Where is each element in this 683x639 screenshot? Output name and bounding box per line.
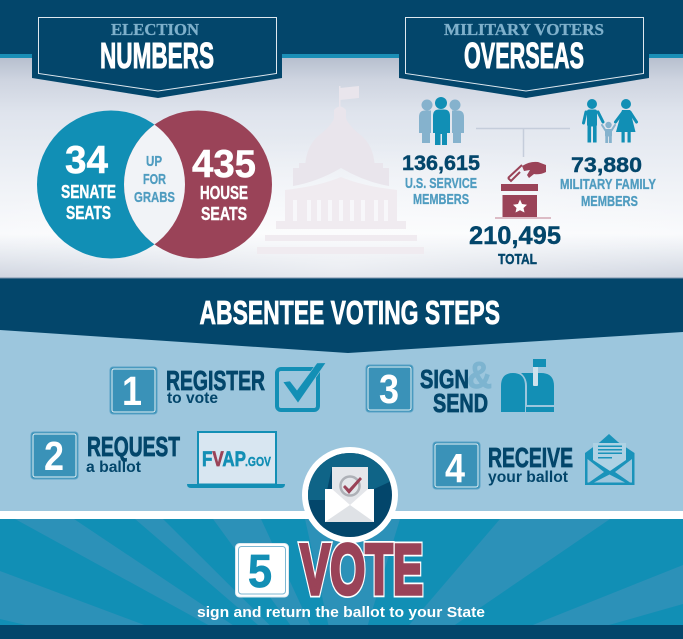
icon: laptop with fvap.gov: FVAP [202, 448, 246, 471]
banner: election numbers [32, 0, 282, 98]
step 4: receive: your ballot [488, 469, 569, 486]
step 5: vote: 5 [248, 545, 272, 597]
step 3: sign and send: SEND [433, 388, 488, 418]
icon: open envelope with letter [585, 434, 634, 485]
panel: vote footer [0, 511, 683, 639]
stat: service members [402, 152, 480, 208]
step 5: vote: VOTE [300, 531, 423, 610]
stat: total: TOTAL [498, 251, 537, 268]
house seats label [192, 143, 256, 224]
stat: total: 210,495 [469, 222, 561, 250]
banner: military voters overseas: OVERSEAS [464, 35, 584, 76]
stat: military family [560, 154, 656, 210]
senate seats label: SEATS [66, 203, 111, 223]
venn diagram: seats up for grabs [37, 110, 272, 258]
up for grabs label: GRABS [134, 189, 175, 206]
step 4: receive [433, 442, 573, 491]
step 1: register: 1 [122, 368, 142, 414]
banner: election numbers: NUMBERS [100, 35, 214, 76]
senate seats label: SENATE [61, 182, 116, 202]
step 4: receive: 4 [445, 445, 465, 491]
up for grabs label [134, 153, 175, 206]
connector lines [476, 128, 570, 157]
panel: absentee voting steps [0, 278, 683, 519]
step 2: request [31, 431, 180, 479]
step 2: request: a ballot [86, 459, 142, 476]
up for grabs label: FOR [143, 171, 166, 188]
step 2: request: REQUEST [87, 431, 180, 462]
step 3: sign and send: 3 [379, 366, 399, 412]
step 3: sign and send [366, 355, 492, 418]
banner: election numbers: ELECTION [111, 20, 200, 39]
stat: total [469, 222, 561, 268]
step 1: register: REGISTER [166, 365, 265, 396]
stat: military family: 73,880 [571, 154, 642, 177]
banner: military voters overseas [399, 0, 649, 98]
illustration: capitol building [257, 86, 424, 254]
step 1: register: to vote [167, 390, 218, 407]
stat: military family: MILITARY FAMILY [560, 176, 656, 193]
icon: ballot box [495, 162, 551, 219]
step 1: register [110, 365, 265, 414]
icon: service members [419, 97, 464, 145]
house seats label: SEATS [201, 204, 247, 224]
icon: military family [584, 99, 636, 143]
stat: military family: MEMBERS [581, 193, 638, 210]
icon: checkbox [277, 363, 326, 410]
house seats label: HOUSE [200, 183, 248, 203]
step 3: sign and send: & [467, 355, 492, 396]
senate seats label: 34 [65, 139, 108, 182]
house seats label: 435 [192, 143, 256, 186]
banner: military voters overseas: MILITARY VOTERS [444, 20, 604, 39]
step 5: vote: VOTE [300, 531, 423, 610]
background: upper section [0, 0, 683, 278]
caption: sign and return: sign and return the ballot to your State [197, 604, 485, 621]
step 3: sign and send: SIGN [420, 364, 469, 394]
step 4: receive: RECEIVE [488, 442, 573, 473]
stat: service members: U.S. SERVICE [405, 175, 477, 192]
stat: service members: 136,615 [402, 152, 480, 175]
step 5: vote [236, 531, 423, 610]
stat: service members: MEMBERS [413, 191, 469, 208]
icon: mailbox [501, 359, 554, 412]
icon: laptop with fvap.gov: .GOV [245, 454, 271, 469]
up for grabs label: UP [146, 153, 162, 170]
icon: envelope badge [302, 447, 398, 543]
senate seats label [61, 139, 116, 223]
icon: laptop with fvap.gov [187, 432, 285, 488]
heading: absentee voting steps: ABSENTEE VOTING STEPS [200, 294, 500, 331]
step 2: request: 2 [44, 433, 64, 479]
